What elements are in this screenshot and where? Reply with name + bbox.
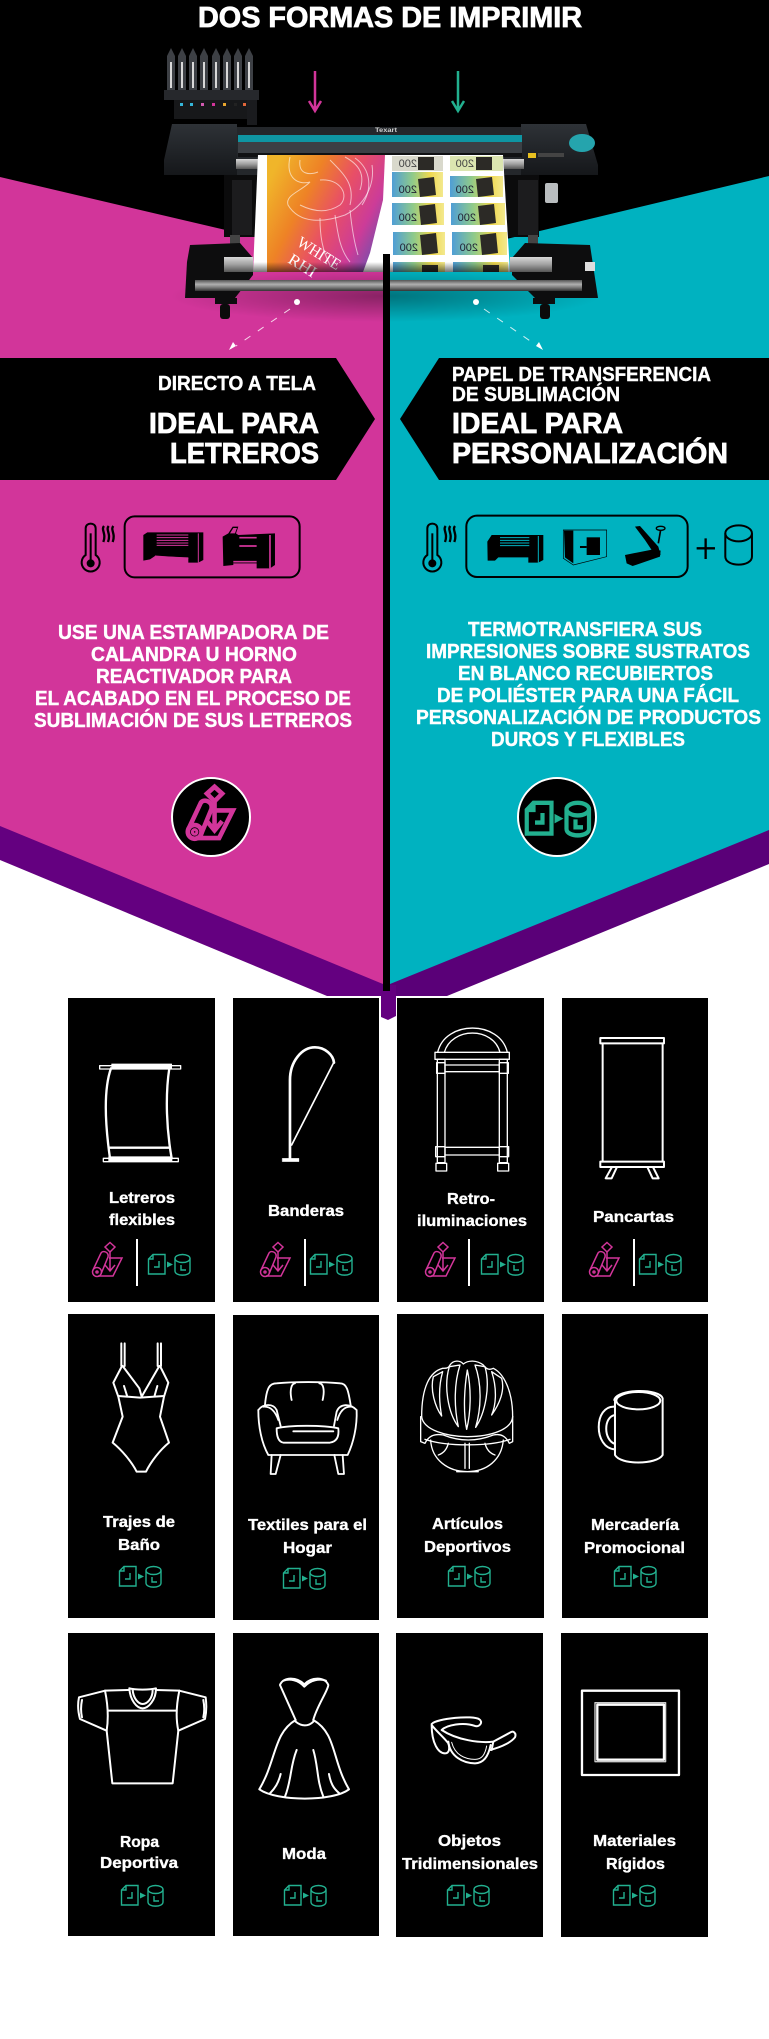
arrow: green down (452, 71, 464, 111)
description: teal (416, 618, 761, 751)
printer (164, 48, 600, 322)
description: teal: DUROS Y FLEXIBLES (491, 728, 685, 751)
card: Retro-iluminaciones: Retro- (447, 1191, 495, 1208)
card: Trajes de Baño: Trajes de (103, 1514, 175, 1531)
card: Pancartas: Pancartas (593, 1209, 674, 1226)
printed bank note samples: 200 (456, 184, 474, 196)
finishing equipment icons: teal (423, 516, 752, 577)
printed bank note samples: 200 (456, 158, 474, 170)
printed bank note samples: 200 (399, 212, 417, 224)
card: Materiales Rígidos (561, 1633, 708, 1937)
printer: Texart (375, 128, 397, 134)
printed bank note samples: 200 (399, 184, 417, 196)
banner: directo a tela: LETREROS (170, 438, 319, 470)
banner: directo a tela: DIRECTO A TELA (158, 373, 316, 395)
card: Objetos Tridimensionales: Tridimensionales (402, 1856, 538, 1873)
card: Objetos Tridimensionales: Objetos (438, 1833, 501, 1850)
card: Trajes de Baño: Baño (118, 1537, 160, 1554)
card: Objetos Tridimensionales (396, 1633, 543, 1937)
badge: direct sublimation (172, 778, 250, 856)
title: DOS FORMAS DE IMPRIMIR (198, 2, 582, 34)
description: pink: USE UNA ESTAMPADORA DE (58, 621, 329, 644)
panel: direct to fabric (pink) (0, 177, 383, 996)
description: teal: EN BLANCO RECUBIERTOS (458, 662, 713, 685)
printed bank note samples: 200 (460, 242, 478, 254)
card: Ropa Deportiva (68, 1633, 215, 1936)
printed media: RHI (285, 251, 319, 281)
card: Materiales Rígidos: Rígidos (606, 1856, 665, 1873)
top black background (0, 0, 769, 360)
badge: transfer sublimation (518, 778, 596, 856)
card: Retro-iluminaciones (397, 998, 544, 1302)
description: teal: DE POLIÉSTER PARA UNA FÁCIL (437, 684, 739, 707)
panel: transfer paper (teal) (390, 176, 769, 996)
arrow: pink down (309, 71, 321, 111)
finishing equipment icons: pink (82, 516, 300, 577)
card: Mercadería Promocional (562, 1314, 708, 1618)
card: Ropa Deportiva: Deportiva (100, 1855, 178, 1872)
printer body (164, 124, 237, 175)
dashed arrow left (229, 299, 300, 350)
printed bank note samples: 200 (458, 212, 476, 224)
printed bank note samples (253, 156, 510, 272)
card: Textiles para el Hogar: Hogar (283, 1540, 332, 1557)
card: Retro-iluminaciones: iluminaciones (417, 1213, 527, 1230)
purple bottom tab (381, 985, 396, 1020)
description: pink: CALANDRA U HORNO (91, 643, 297, 666)
printed bank note samples: 200 (400, 242, 418, 254)
ink cartridges rack (164, 48, 259, 125)
card: Ropa Deportiva: Ropa (120, 1834, 159, 1851)
banner: papel de transferencia: IDEAL PARA (452, 408, 623, 440)
card: Trajes de Baño (68, 1314, 215, 1618)
card: Letreros flexibles (68, 998, 215, 1302)
card: Textiles para el Hogar: Textiles para el (248, 1517, 367, 1534)
description: teal: TERMOTRANSFIERA SUS (468, 618, 702, 641)
banner: papel de transferencia (400, 358, 769, 480)
card: Mercadería Promocional: Promocional (584, 1540, 685, 1557)
card: Textiles para el Hogar (233, 1315, 379, 1620)
description: teal: IMPRESIONES SOBRE SUSTRATOS (426, 640, 750, 663)
take-up stands and rollers (185, 243, 598, 319)
banner: papel de transferencia: PAPEL DE TRANSFERENCIA (452, 364, 711, 386)
card: Moda (233, 1633, 379, 1936)
banner: directo a tela (0, 358, 375, 480)
card: Banderas (233, 998, 379, 1302)
dashed arrow right (473, 299, 543, 350)
central divider (383, 254, 390, 991)
description: pink: SUBLIMACIÓN DE SUS LETREROS (34, 708, 352, 732)
description: pink: REACTIVADOR PARA (96, 665, 292, 688)
card: Letreros flexibles: Letreros (109, 1190, 175, 1207)
card: Banderas: Banderas (268, 1203, 344, 1220)
card: Pancartas (562, 998, 708, 1302)
printed media: WHITE (294, 234, 344, 274)
banner: papel de transferencia: PERSONALIZACIÓN (452, 436, 728, 470)
card: Mercadería Promocional: Mercadería (591, 1517, 679, 1534)
printed media (253, 155, 510, 281)
card: Letreros flexibles: flexibles (109, 1212, 175, 1229)
printed bank note samples: 200 (399, 158, 417, 170)
card: Artículos Deportivos: Artículos (432, 1516, 503, 1533)
card: Artículos Deportivos: Deportivos (424, 1539, 511, 1556)
card: Materiales Rígidos: Materiales (593, 1833, 676, 1850)
banner: directo a tela: IDEAL PARA (149, 408, 319, 440)
description: pink (34, 621, 352, 732)
card: Moda: Moda (282, 1846, 326, 1863)
banner: papel de transferencia: DE SUBLIMACIÓN (452, 382, 620, 406)
description: pink: EL ACABADO EN EL PROCESO DE (35, 687, 351, 710)
card: Artículos Deportivos (397, 1314, 544, 1618)
